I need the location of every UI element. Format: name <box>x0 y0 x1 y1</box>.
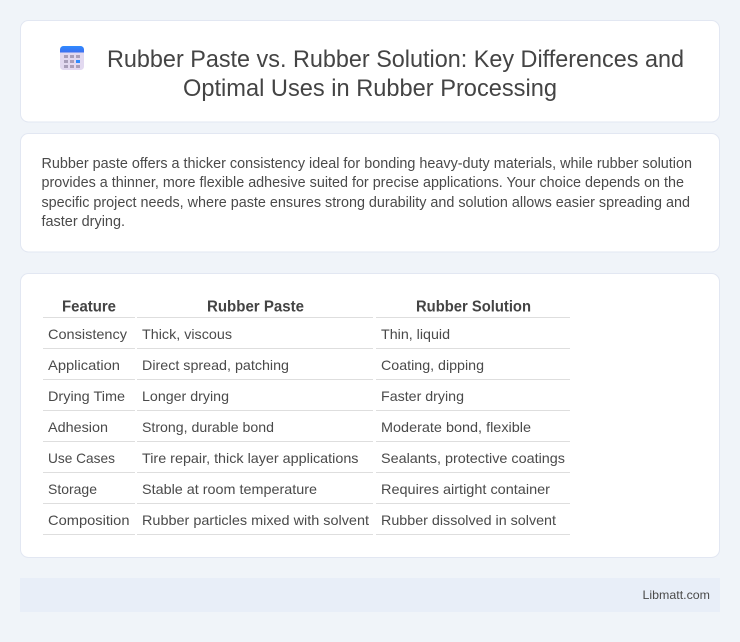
row: use cases: Sealants, protective coatings <box>381 450 565 466</box>
row: composition: Composition <box>48 512 130 528</box>
intro paragraph: specific project needs, where paste ensures strong durability and solution allows easier spreading and <box>42 195 690 211</box>
row: use cases: Tire repair, thick layer applications <box>142 450 358 466</box>
row: adhesion <box>48 419 531 435</box>
row: use cases: Use Cases <box>48 450 115 466</box>
row: application <box>48 357 484 373</box>
row: consistency: Thin, liquid <box>381 326 450 342</box>
row: drying time: Longer drying <box>142 388 229 404</box>
row: consistency: Thick, viscous <box>142 326 232 342</box>
row: storage: Stable at room temperature <box>142 481 317 497</box>
row: composition: Rubber dissolved in solvent <box>381 512 556 528</box>
row: consistency <box>48 326 450 342</box>
row: composition: Rubber particles mixed with solvent <box>142 512 369 528</box>
row: adhesion: Strong, durable bond <box>142 419 274 435</box>
row: adhesion: Adhesion <box>48 419 108 435</box>
panel: title <box>20 20 720 122</box>
table header: Rubber Solution <box>416 298 531 316</box>
row: application: Direct spread, patching <box>142 357 289 373</box>
row: consistency: Consistency <box>48 326 127 342</box>
panel: intro text <box>20 134 720 252</box>
row: drying time: Drying Time <box>48 388 125 404</box>
row: drying time: Faster drying <box>381 388 464 404</box>
table header: Rubber Paste <box>207 298 304 316</box>
panel: comparison table <box>20 274 720 558</box>
row: application: Application <box>48 357 120 373</box>
icon: calendar <box>60 46 84 70</box>
intro paragraph: provides a thinner, more flexible adhesive suited for precise applications. Your choice depends on the <box>42 175 684 191</box>
row: storage <box>48 481 550 497</box>
title <box>107 46 684 102</box>
footer source text: Libmatt.com <box>642 588 710 602</box>
intro paragraph: Rubber paste offers a thicker consistency ideal for bonding heavy-duty materials, while rubber solution <box>42 156 692 172</box>
footer <box>20 578 720 612</box>
row: adhesion: Moderate bond, flexible <box>381 419 531 435</box>
row: composition <box>48 512 556 528</box>
row: storage: Requires airtight container <box>381 481 550 497</box>
table header: Feature <box>62 298 116 316</box>
table header <box>62 298 531 316</box>
title: Rubber Paste vs. Rubber Solution: Key Differences and <box>107 46 684 73</box>
intro paragraph: faster drying. <box>42 214 125 230</box>
row: storage: Storage <box>48 481 97 497</box>
intro paragraph <box>42 156 692 230</box>
title: Optimal Uses in Rubber Processing <box>183 75 557 102</box>
row: drying time <box>48 388 464 404</box>
row: use cases <box>48 450 565 466</box>
row: application: Coating, dipping <box>381 357 484 373</box>
